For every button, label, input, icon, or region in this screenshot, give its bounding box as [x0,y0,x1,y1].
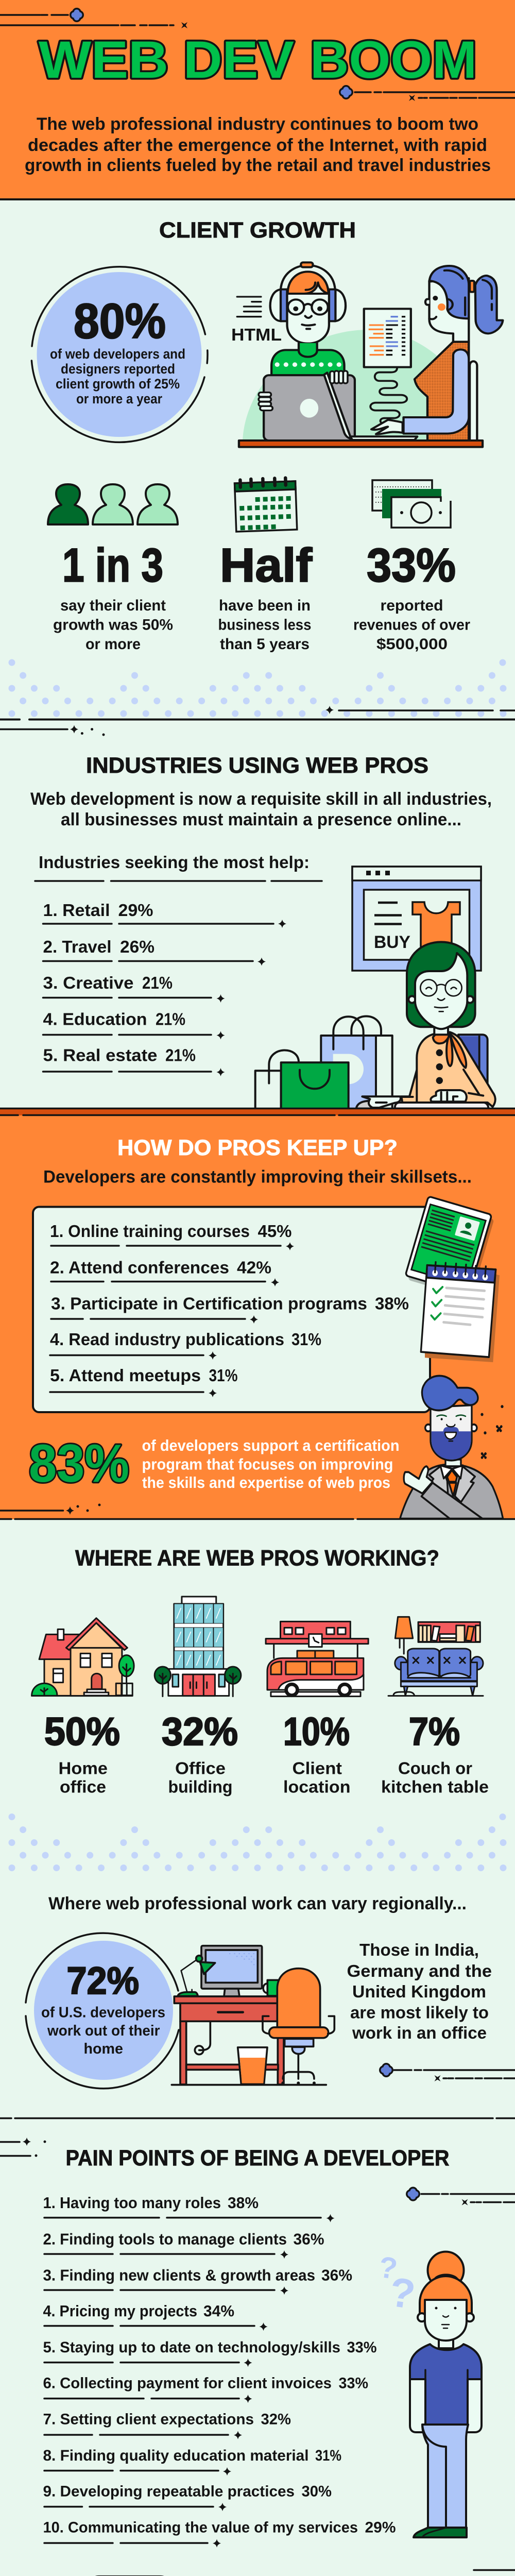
certification text: program that focuses on improving [142,1455,393,1473]
stat: office building: 32% [162,1710,238,1754]
stat: half: business less [218,616,311,634]
decorative line cluster top left [0,9,187,28]
illustration: online store browser window: BUY [374,933,410,952]
desk edge band [0,1108,515,1115]
item: industry publications: 4. Read industry publications [50,1330,284,1349]
illustration: woman at desk with shopping bags [255,942,495,1111]
heading: pain points: PAIN POINTS OF BEING A DEVELOPER [66,2146,449,2171]
decorative line cluster right [340,87,515,101]
stat: 33 percent: reported [380,597,443,614]
office countries text: Germany and the [347,1961,492,1980]
item 9: 9. Developing repeatable practices [43,2483,295,2500]
stat: couch or kitchen table: kitchen table [381,1777,489,1796]
icon: question marks: ? [376,2250,400,2286]
label: HTML: HTML [231,325,282,344]
item 2: 36% [294,2230,324,2248]
icon: question marks: ? [387,2269,418,2317]
notepad [421,1262,500,1362]
item: creative [43,973,225,1003]
item: travel [43,937,266,965]
item: online training courses: 45% [258,1222,291,1241]
icon: bus and station [266,1621,368,1697]
stat: client location [283,1710,350,1796]
stat: 83 percent: 83% [29,1434,129,1494]
office countries text: United Kingdom [352,1982,486,2001]
title: DEV [183,30,294,89]
stat: home office: 50% [44,1710,120,1754]
decorative line cluster [407,2188,515,2205]
icon: question marks [376,2250,418,2317]
item: attend conferences: 2. Attend conferences [50,1258,229,1277]
item 1 [43,2194,335,2223]
item 8 [43,2447,341,2476]
item 10: 10. Communicating the value of my services [43,2519,358,2536]
item 5: 5. Staying up to date on technology/skills [43,2339,340,2356]
item 4: 4. Pricing my projects [43,2302,197,2320]
decorative line cluster [337,2570,515,2576]
item: travel: 26% [120,937,154,956]
callout: 80 percent circle: or more a year [76,391,162,406]
callout: 80 percent circle: 80% [74,294,166,349]
item: industry publications: 31% [291,1330,321,1349]
item 6: 33% [339,2375,368,2392]
stat: 33 percent [353,539,470,653]
illustration: confused developer standing [410,2251,482,2537]
stat: office building: Office [175,1759,226,1777]
stat: half: than 5 years [220,636,310,653]
icon: couch, lamp and shelf [388,1617,483,1696]
callout: 72 percent circle: 72% [67,1959,139,2002]
green shopping bag [281,1062,349,1109]
item 7: 32% [261,2411,291,2428]
item: online training courses: 1. Online training courses [50,1222,250,1241]
industries intro text: Web development is now a requisite skill in all industries, [30,789,492,809]
item: creative: 21% [142,973,173,992]
icon: three people, one highlighted [48,484,178,524]
item 6: 6. Collecting payment for client invoices [43,2375,332,2392]
office countries text: work in an office [352,2023,487,2042]
certification text: the skills and expertise of web pros [142,1473,390,1492]
stat: 33 percent: 33% [367,539,456,591]
item: education: 21% [156,1010,185,1028]
item 1: 1. Having too many roles [43,2194,221,2212]
stat: home office: Home [59,1759,108,1777]
callout: 72 percent circle: work out of their [47,2023,160,2039]
icon: house [32,1618,134,1696]
item: retail [43,901,286,928]
item 5: 33% [347,2339,377,2356]
subheading: Developers are constantly improving their skillsets... [43,1167,472,1187]
intro text: The web professional industry continues to boom two [37,114,478,134]
icon: office building [154,1597,241,1697]
stat: couch or kitchen table: Couch or [398,1759,472,1777]
white shopping bag [255,1050,299,1109]
item: creative: 3. Creative [43,973,134,992]
item 2: 2. Finding tools to manage clients [43,2230,287,2248]
callout: 80 percent circle: of web developers and [50,346,185,362]
item: real estate: 21% [165,1046,196,1064]
item 10 [43,2519,396,2547]
item: attend meetups: 5. Attend meetups [50,1366,201,1385]
list: pain points [43,2194,396,2547]
intro text: growth in clients fueled by the retail and travel industries [25,156,491,175]
stat: half: have been in [219,597,311,614]
panel: header [0,0,515,201]
item: attend conferences [50,1258,279,1286]
certification text: of developers support a certification [142,1436,400,1454]
item: attend meetups [50,1366,238,1397]
stat: 33 percent: revenues of over [353,616,470,634]
item 3: 3. Finding new clients & growth areas [43,2266,315,2284]
stat: 1 in 3 [53,539,173,653]
stat: client location: Client [293,1759,342,1777]
item 3: 36% [321,2266,352,2284]
title: WEB [39,30,168,89]
stat: home office [44,1710,120,1796]
item 6 [43,2375,368,2403]
item: attend meetups: 31% [209,1366,238,1385]
item: certification programs: 3. Participate in Certification programs [51,1294,367,1313]
heading: where are web pros working: WHERE ARE WEB PROS WORKING? [75,1546,439,1570]
item 2 [43,2230,324,2259]
stat: 1 in 3: 1 in 3 [62,539,163,591]
list heading: industries seeking the most help: Industries seeking the most help: [39,853,310,872]
callout: 80 percent circle: designers reported [61,361,175,377]
item: real estate [43,1046,225,1076]
item 10: 29% [365,2519,396,2536]
man with beard in suit [400,1376,504,1519]
icon: calendar [234,478,297,532]
intro text: decades after the emergence of the Internet, with rapid [28,135,487,155]
item 4: 34% [203,2302,234,2320]
heading: how do pros keep up: HOW DO PROS KEEP UP? [117,1136,398,1160]
stat: half [218,539,312,653]
decorative line cluster [380,2064,515,2081]
blue shopping bag [321,1016,392,1111]
stat: office building [162,1710,238,1796]
item 4 [43,2302,268,2331]
callout: 80 percent circle: client growth of 25% [56,376,180,392]
stat: couch or kitchen table [381,1710,489,1796]
item 7 [43,2411,291,2439]
item: education: 4. Education [43,1010,147,1028]
item 3 [43,2266,352,2295]
stat: client location: location [283,1777,350,1796]
heading: industries using web pros: INDUSTRIES USING WEB PROS [86,753,428,778]
stat: 1 in 3: or more [85,636,141,653]
panel: how do pros keep up [0,1115,515,1519]
illustration: desk with computer and chair [171,1946,334,2085]
industries intro text: all businesses must maintain a presence online... [61,810,461,829]
panel: client growth and industries background [0,200,515,1110]
stat: half: Half [220,539,312,591]
certification text [142,1436,400,1492]
item: retail: 29% [118,901,153,920]
callout: 72 percent circle [26,1933,179,2089]
list panel [33,1207,430,1412]
intro text [25,114,491,175]
office countries text [347,1940,492,2042]
title [39,30,477,89]
item 9: 30% [302,2483,332,2500]
heading: client growth: CLIENT GROWTH [159,218,356,243]
item: online training courses [50,1222,294,1250]
item: certification programs: 38% [375,1294,409,1313]
item: attend conferences: 42% [237,1258,271,1277]
stat: home office: office [60,1777,106,1796]
item: education [43,1010,225,1040]
item 1: 38% [228,2194,259,2212]
icon: money bills [372,480,451,528]
icon: notepad and man in suit [400,1262,504,1519]
icon: tablet with resume [404,1196,495,1298]
stat: office building: building [168,1777,233,1796]
item: industry publications [50,1330,321,1360]
stat: 1 in 3: growth was 50% [53,616,173,634]
title: BOOM [310,30,477,89]
stat: 33 percent: $500,000 [376,636,448,653]
callout: 72 percent circle: of U.S. developers [41,2004,165,2021]
callout: 80 percent circle [31,267,208,442]
stat: 1 in 3: say their client [60,597,166,614]
item: real estate: 5. Real estate [43,1046,158,1064]
illustration: online store browser window [352,867,481,971]
item 8: 8. Finding quality education material [43,2447,309,2464]
item: retail: 1. Retail [43,901,110,920]
item 9 [43,2483,332,2511]
illustration: developer with headphones and designer at a screen [231,262,503,447]
industries intro text [30,789,492,829]
list: industries [43,901,286,1076]
item 7: 7. Setting client expectations [43,2411,254,2428]
regional intro text: Where web professional work can vary regionally... [48,1894,467,1913]
stat: couch or kitchen table: 7% [409,1710,460,1754]
office countries text: are most likely to [350,2003,489,2022]
item: certification programs [51,1294,409,1324]
icon row: workplaces [32,1597,483,1697]
item: travel: 2. Travel [43,937,111,956]
stat: client location: 10% [283,1710,350,1754]
office countries text: Those in India, [359,1940,479,1959]
item 5 [43,2339,377,2367]
callout: 72 percent circle: home [83,2041,123,2057]
item 8: 31% [315,2447,341,2464]
